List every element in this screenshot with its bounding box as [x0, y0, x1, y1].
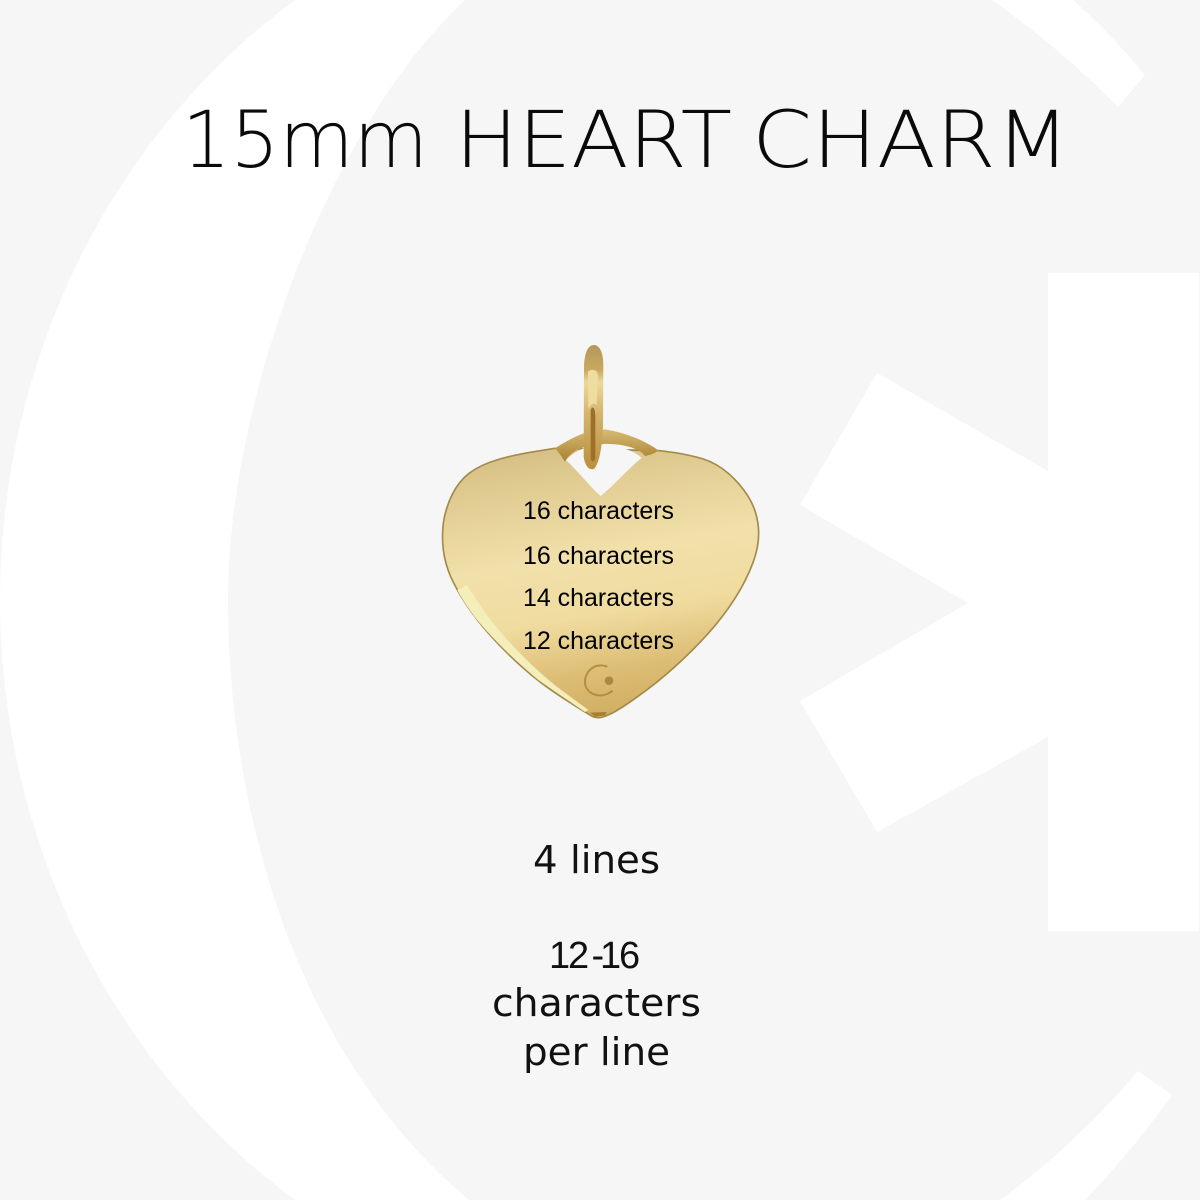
jump ring [584, 345, 603, 469]
title [182, 96, 1070, 186]
title: HEART [455, 96, 732, 186]
title: 15mm [182, 96, 428, 186]
heart charm pendant [442, 345, 759, 718]
specification text: per line [523, 1030, 670, 1074]
specification text: characters [492, 981, 701, 1025]
specification text: 12-16 [549, 935, 640, 977]
bottom tip shadow [590, 712, 607, 717]
engraved character lines [523, 498, 674, 655]
top bridge [555, 429, 659, 462]
opening [566, 446, 642, 496]
heart body [442, 448, 759, 718]
engraved character lines: 16 characters [523, 543, 674, 570]
specification text [492, 838, 701, 1074]
engraved character lines: 12 characters [523, 628, 674, 655]
title: CHARM [752, 96, 1070, 186]
engraved character lines: 16 characters [523, 498, 674, 525]
specification text: 4 lines [533, 838, 660, 882]
lower left rim highlight [457, 585, 588, 712]
engraved character lines: 14 characters [523, 585, 674, 612]
maker's mark [585, 665, 613, 695]
